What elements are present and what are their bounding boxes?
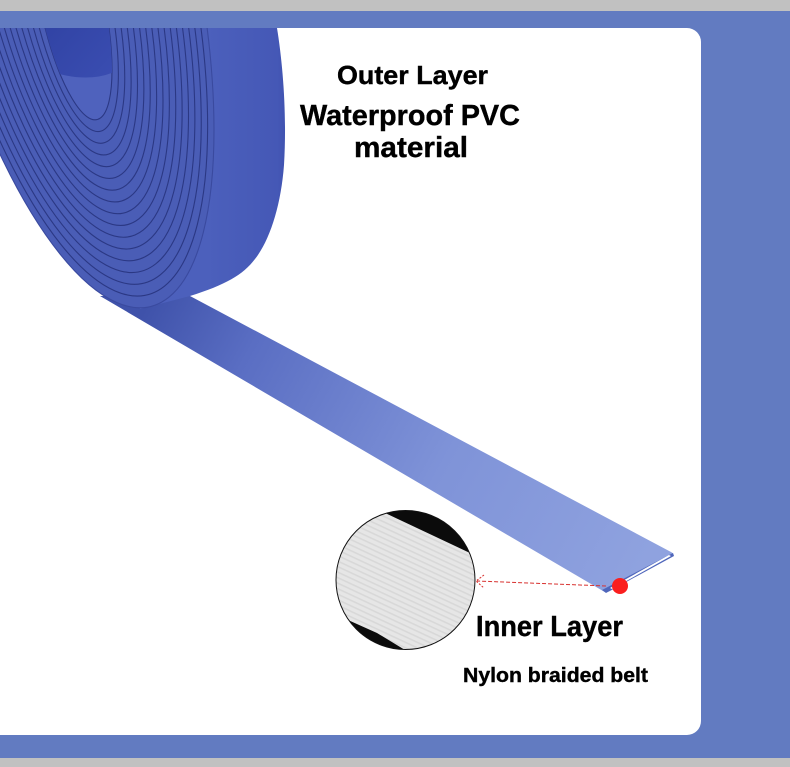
flat strap extending from the roll <box>100 296 674 593</box>
roll centre hole <box>45 28 112 78</box>
arrow: callout from strap end to inset <box>476 575 606 588</box>
outer layer title: Outer Layer <box>337 60 488 90</box>
top grey strip <box>0 0 790 11</box>
roll of strap <box>0 28 285 309</box>
heading: outer layer <box>300 60 520 164</box>
bottom grey strip <box>0 758 790 767</box>
marker: red dot <box>612 578 628 594</box>
outer layer material line 2: material <box>354 132 468 164</box>
inner layer material: Nylon braided belt <box>463 665 648 687</box>
magnified inset: nylon weave <box>336 510 476 650</box>
roll outer side wall <box>140 28 285 309</box>
outer layer material line 1: Waterproof PVC <box>300 100 520 132</box>
inner layer title: Inner Layer <box>476 611 623 643</box>
heading: inner layer <box>463 611 648 687</box>
roll face rings <box>0 28 214 308</box>
